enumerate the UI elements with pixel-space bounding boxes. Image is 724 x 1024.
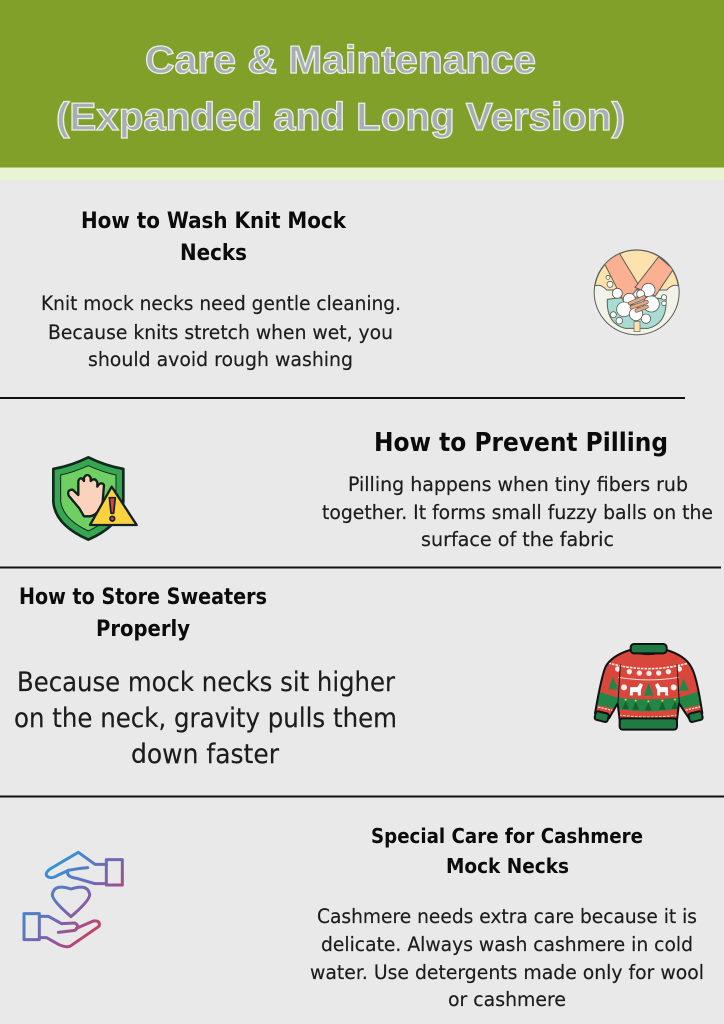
panel: prevent pilling: [53, 428, 713, 551]
heading: cashmere: Special Care for Cashmere: [371, 824, 643, 848]
text: cashmere: Cashmere needs extra care because it is: [317, 905, 697, 928]
text: pilling: Pilling happens when tiny fibers rub: [348, 473, 688, 496]
text: store: down faster: [131, 739, 279, 770]
text: pilling: surface of the fabric: [421, 528, 614, 551]
heading: wash: How to Wash Knit Mock: [81, 209, 347, 234]
text: cashmere: or cashmere: [448, 988, 566, 1011]
text: store: [14, 667, 397, 770]
icon: washing hands: [593, 250, 680, 337]
text: store: on the neck, gravity pulls them: [14, 703, 397, 734]
collar: [631, 644, 667, 653]
title: Care & Maintenance: [145, 39, 536, 82]
title: (Expanded and Long Version): [56, 96, 625, 139]
text: wash: Knit mock necks need gentle cleaning.: [41, 292, 401, 315]
text: wash: should avoid rough washing: [88, 348, 353, 371]
title: [56, 39, 625, 139]
panel: cashmere care: [24, 824, 704, 1011]
divider line: [0, 566, 721, 568]
text: wash: [41, 292, 401, 371]
icon: shield with hand and warning: [53, 457, 137, 540]
heading: cashmere: Mock Necks: [446, 854, 569, 878]
heading: pilling: How to Prevent Pilling: [374, 428, 668, 458]
text: cashmere: water. Use detergents made only for wool: [310, 961, 704, 984]
divider line: [0, 397, 685, 399]
divider line: [0, 796, 724, 798]
reindeer: [630, 684, 668, 695]
panel: how to wash: [41, 209, 680, 371]
text: wash: Because knits stretch when wet, you: [48, 321, 393, 344]
heading: store: Properly: [96, 617, 190, 642]
heading: cashmere: [371, 824, 643, 878]
text: cashmere: [310, 905, 704, 1011]
text: cashmere: delicate. Always wash cashmere in cold: [321, 933, 693, 956]
panel: store sweaters: [14, 585, 703, 770]
heading: wash: Necks: [180, 241, 247, 266]
heading: wash: [81, 209, 347, 266]
text: pilling: together. It forms small fuzzy balls on the: [322, 501, 713, 524]
text: store: Because mock necks sit higher: [17, 667, 395, 698]
icon: hands holding heart: [24, 852, 122, 947]
heading: store: How to Store Sweaters: [19, 585, 267, 610]
heading: store: [19, 585, 267, 642]
header banner: [0, 0, 724, 180]
cuffs: [594, 711, 609, 722]
hem: [620, 718, 677, 730]
text: pilling: [322, 473, 713, 551]
icon: christmas sweater: [593, 644, 703, 730]
